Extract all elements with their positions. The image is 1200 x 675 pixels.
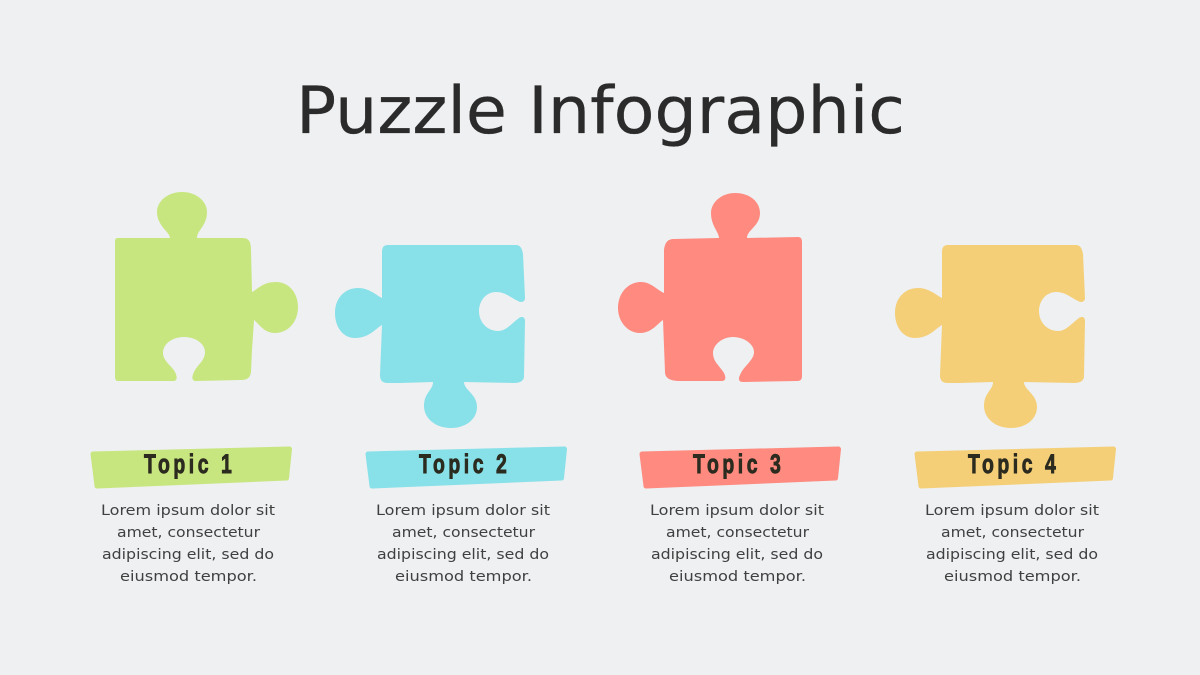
text block: topic 1: amet, consectetur (117, 525, 260, 541)
text block: topic 1: Lorem ipsum dolor sit (101, 503, 275, 519)
text block: topic 3: eiusmod tempor. (669, 569, 806, 585)
text block: topic 3: adipiscing elit, sed do (651, 547, 823, 563)
text block: topic 2 (376, 503, 550, 585)
panel: topic 1 (93, 192, 298, 585)
heading: topic 2: Topic 2 (419, 449, 507, 479)
title: Puzzle Infographic (296, 74, 905, 149)
heading: topic 3: Topic 3 (693, 449, 781, 479)
panel: topic 4 (895, 245, 1114, 585)
icon: red puzzle piece (618, 193, 802, 382)
icon: yellow puzzle piece (895, 245, 1085, 428)
text block: topic 1 (101, 503, 275, 585)
text block: topic 4: eiusmod tempor. (944, 569, 1081, 585)
text block: topic 2: Lorem ipsum dolor sit (376, 503, 550, 519)
text block: topic 3: Lorem ipsum dolor sit (650, 503, 824, 519)
label bar: topic 1 (93, 449, 290, 486)
heading: topic 1: Topic 1 (144, 449, 232, 479)
text block: topic 4: Lorem ipsum dolor sit (925, 503, 1099, 519)
panel: topic 2 (335, 245, 564, 585)
text block: topic 4 (925, 503, 1099, 585)
label bar: topic 2 (368, 449, 564, 486)
text block: topic 2: eiusmod tempor. (395, 569, 532, 585)
heading: topic 4: Topic 4 (968, 449, 1056, 479)
text block: topic 3 (650, 503, 824, 585)
text block: topic 1: eiusmod tempor. (120, 569, 257, 585)
label bar: topic 4 (917, 449, 1114, 486)
icon: blue puzzle piece (335, 245, 525, 428)
label bar: topic 3 (642, 449, 838, 486)
text block: topic 2: adipiscing elit, sed do (377, 547, 549, 563)
panel: topic 3 (618, 193, 838, 585)
text block: topic 4: amet, consectetur (941, 525, 1084, 541)
text block: topic 3: amet, consectetur (666, 525, 809, 541)
text block: topic 2: amet, consectetur (392, 525, 535, 541)
icon: green puzzle piece (115, 192, 298, 381)
text block: topic 1: adipiscing elit, sed do (102, 547, 274, 563)
text block: topic 4: adipiscing elit, sed do (926, 547, 1098, 563)
